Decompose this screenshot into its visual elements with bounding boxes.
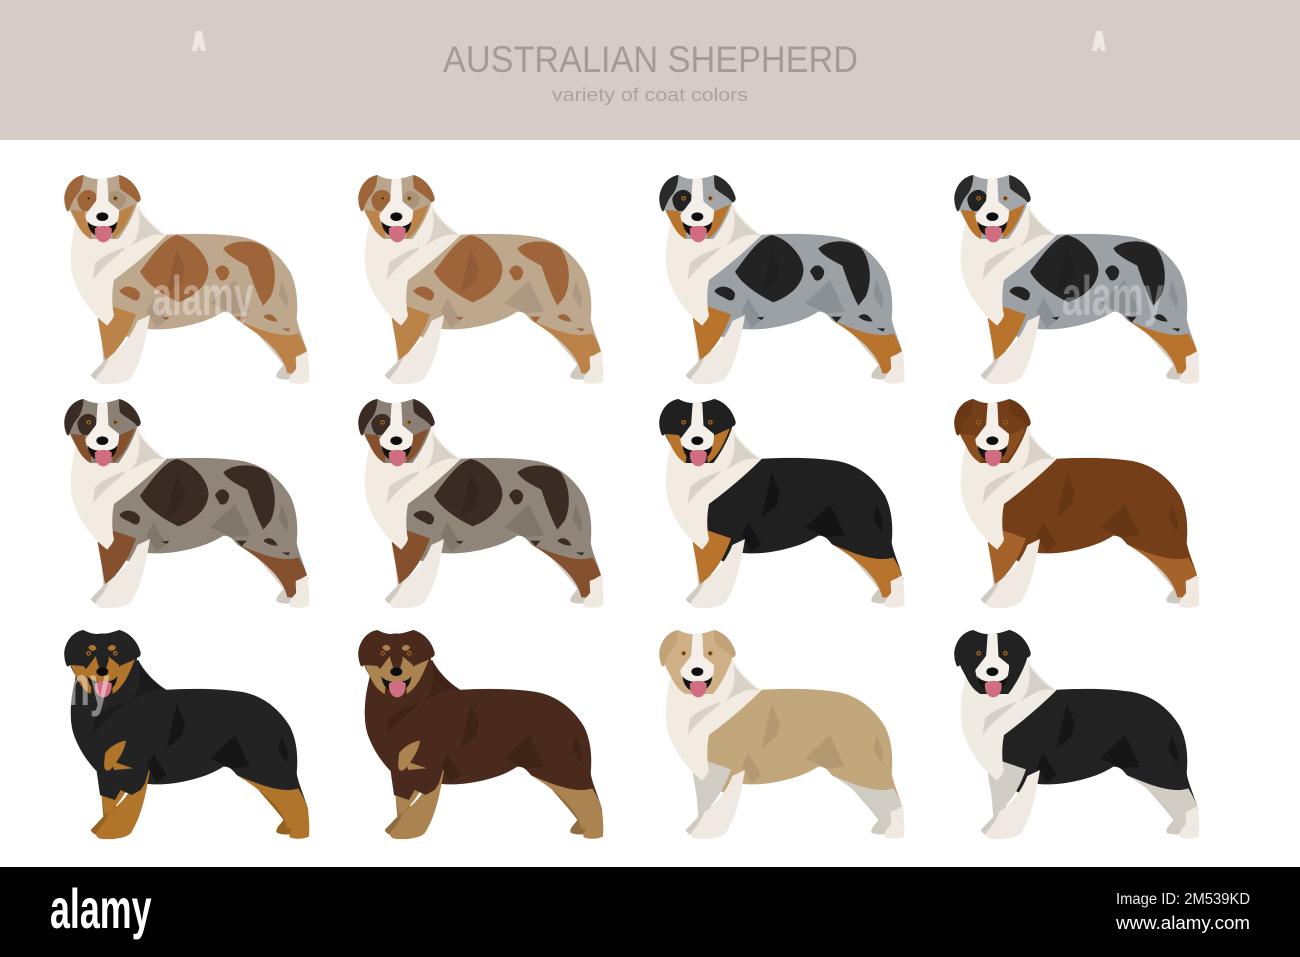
watermark fragment over dog 9: ny [68,654,110,717]
watermark mark left [192,31,206,51]
dog: red tricolor [954,399,1199,608]
dog: black and tan [64,630,309,839]
website: www.alamy.com [1115,913,1250,933]
footer bar [0,867,1300,957]
subtitle: variety of coat colors [552,85,748,105]
watermark mark right [1092,31,1106,51]
dog: sand and white [659,630,904,839]
dog: red merle 1 [64,175,309,384]
dog grid [64,175,1199,839]
footer logo: alamy [50,877,152,940]
dog: red merle 2 [358,175,603,384]
dog: dark merle 1 [64,399,309,608]
image id: Image ID: 2M539KD [1116,891,1250,908]
dog: black and white [954,630,1199,839]
watermark over dog 4: alamy [1062,264,1164,327]
dog: blue merle 1 [659,175,904,384]
dog: blue merle 2 [954,175,1199,384]
header band [0,0,1300,140]
dog: black tricolor [659,399,904,608]
title: AUSTRALIAN SHEPHERD [443,39,858,80]
dog: brown and tan [358,630,603,839]
watermark over dog 1: alamy [152,264,254,327]
dog: dark merle 2 [358,399,603,608]
